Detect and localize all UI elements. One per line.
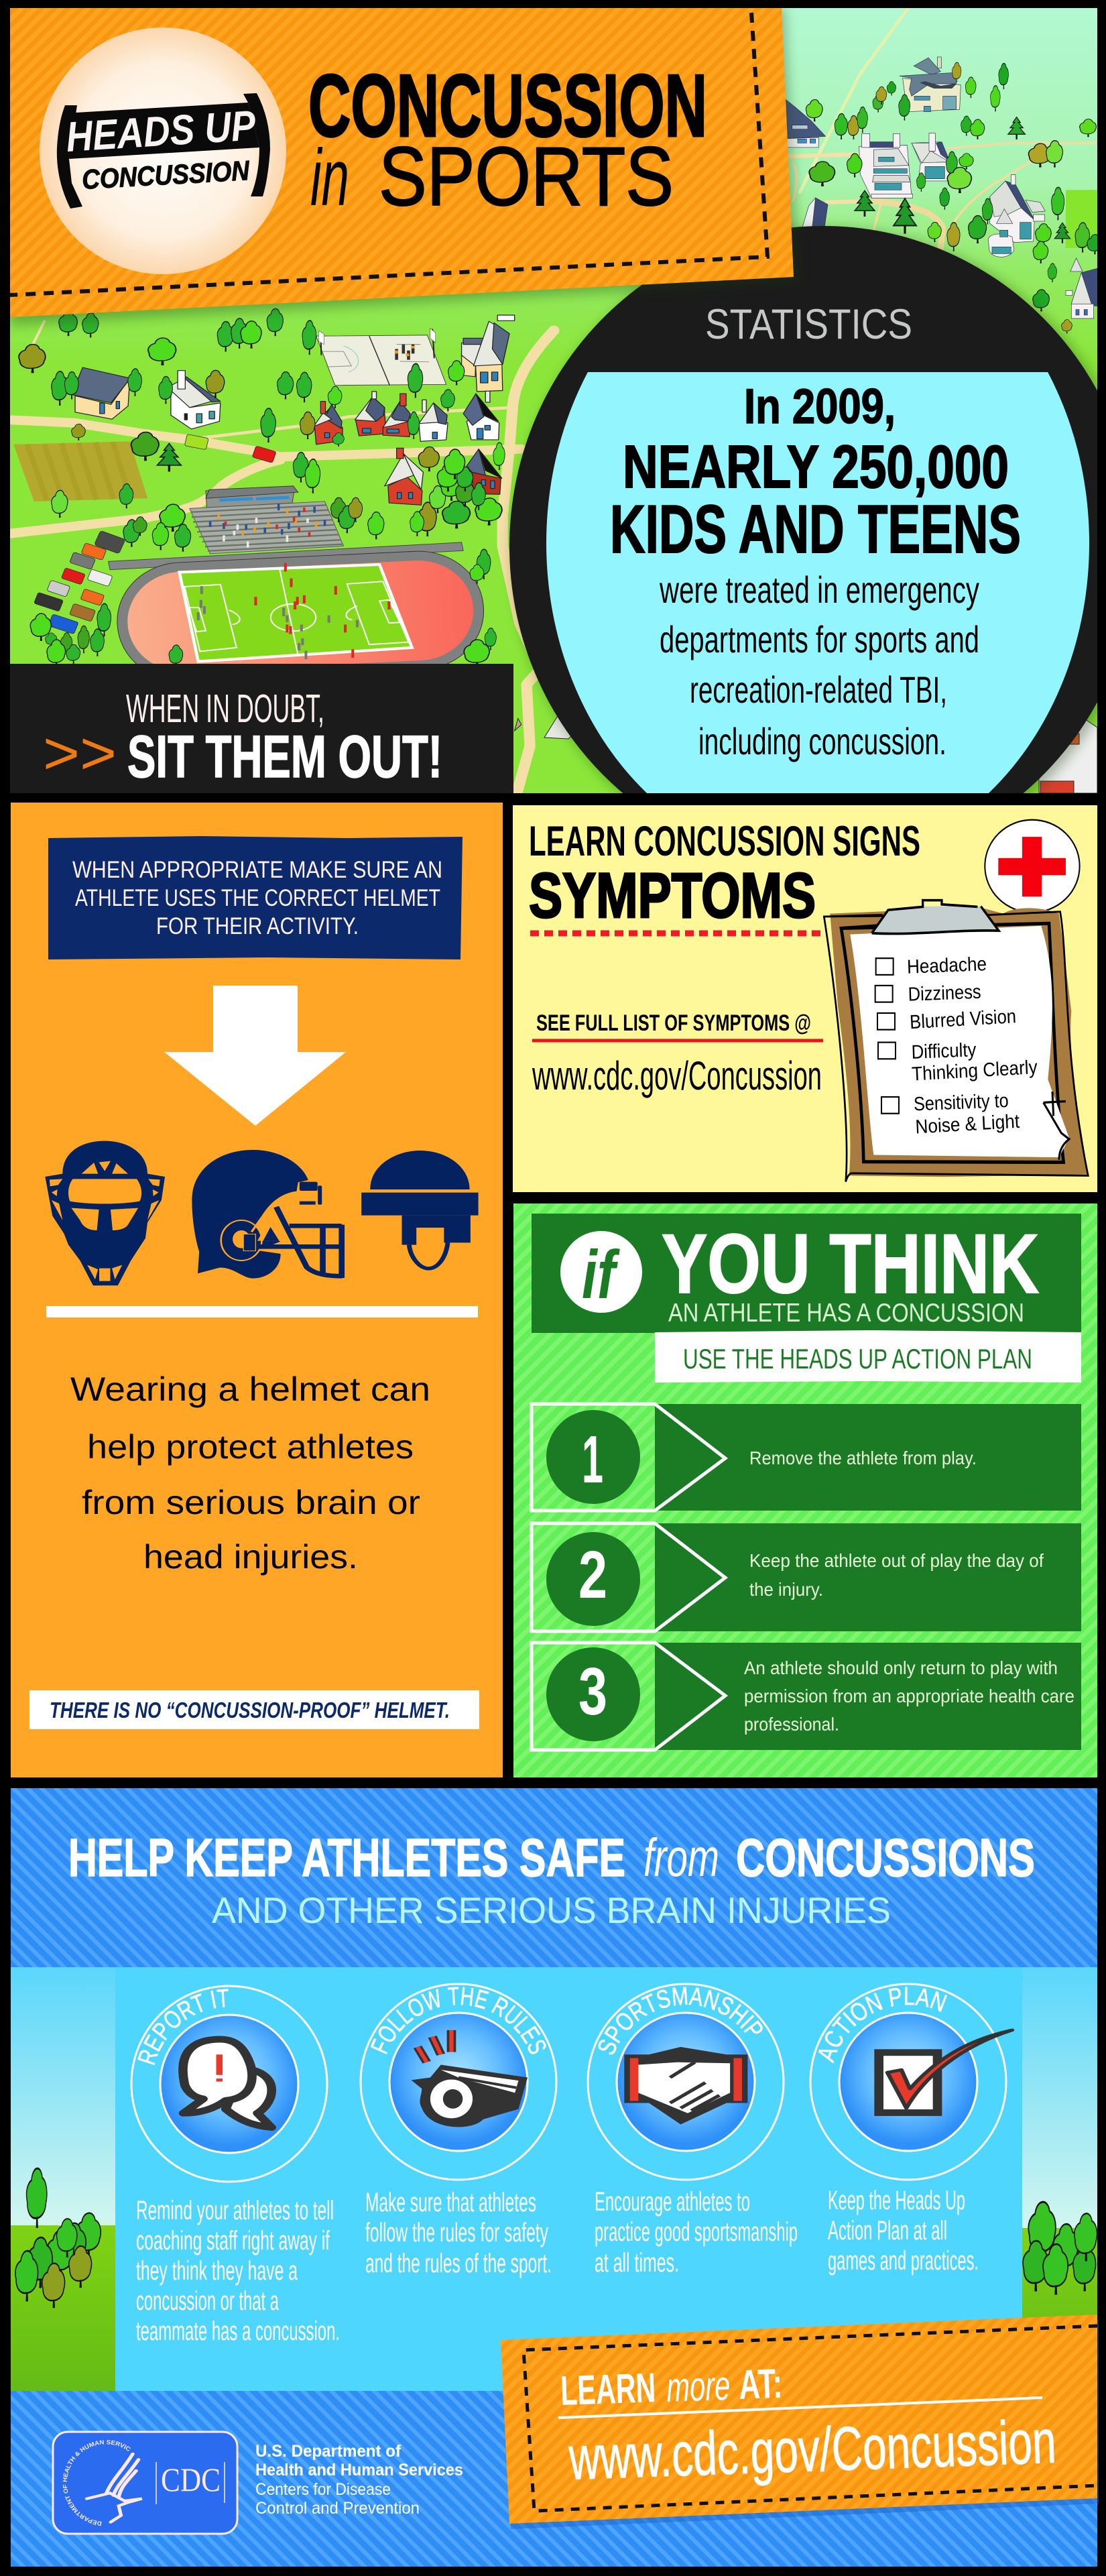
stats shadow <box>505 221 1097 793</box>
icon badge: action plan: ACTION PLAN <box>818 1987 948 2064</box>
tip text: report it <box>136 2196 340 2346</box>
heads up logo: CONCUSSION <box>81 155 251 195</box>
action plan header <box>532 1214 1081 1333</box>
stat text: NEARLY 250,000 <box>623 434 1009 501</box>
safety heading: from <box>643 1828 719 1887</box>
divider bar <box>46 1306 478 1318</box>
action plan header: if <box>582 1236 620 1313</box>
side trees left <box>15 2168 101 2308</box>
icon: clipboard checklist <box>824 900 1088 1182</box>
hhs text: Centers for Disease <box>255 2480 391 2499</box>
icon: catcher mask <box>45 1141 165 1285</box>
step 2 <box>532 1523 1081 1631</box>
tip text: report it: Remind your athletes to tell <box>136 2196 334 2225</box>
see full list text: SEE FULL LIST OF SYMPTOMS @ <box>536 1010 811 1036</box>
icon: red cross <box>985 820 1080 913</box>
house fragments near stats circle <box>544 716 1097 793</box>
arrow: down <box>164 986 346 1126</box>
icon: clipboard checklist: Headache <box>906 953 987 978</box>
grandstand <box>190 486 344 554</box>
olive field <box>13 441 147 502</box>
map: upper right neighbourhood <box>784 7 1102 333</box>
step 2: Keep the athlete out of play the day of <box>749 1550 1044 1571</box>
icon: football helmet <box>192 1150 343 1279</box>
houses <box>72 315 515 505</box>
helmet warning: THERE IS NO “CONCUSSION-PROOF” HELMET. <box>50 1698 450 1722</box>
banner shadow <box>10 8 799 325</box>
hhs text: Health and Human Services <box>255 2461 463 2479</box>
safety heading: AND OTHER SERIOUS BRAIN INJURIES <box>212 1889 891 1931</box>
panel: statistics circle <box>509 226 1097 793</box>
title text: SPORTS <box>379 131 674 223</box>
step 3: 3 <box>578 1654 607 1729</box>
learn more banner <box>501 2315 1099 2529</box>
tip text: report it: coaching staff right away if <box>136 2226 330 2256</box>
tip text: report it: they think they have a <box>136 2256 298 2286</box>
basketball court <box>316 328 446 386</box>
when in doubt text: WHEN IN DOUBT, <box>126 687 324 731</box>
title text: CONCUSSION <box>308 56 707 155</box>
icon: helmets <box>45 1141 479 1285</box>
map: lower left town <box>9 308 554 795</box>
safety heading: HELP KEEP ATHLETES SAFE <box>68 1828 625 1887</box>
step 3 <box>532 1643 1081 1750</box>
icon: hockey helmet <box>361 1151 479 1269</box>
icon badge: action plan <box>810 1983 1015 2180</box>
trees <box>19 308 505 667</box>
action plan header: AN ATHLETE HAS A CONCUSSION <box>668 1299 1024 1328</box>
hhs text: U.S. Department of <box>255 2442 402 2461</box>
learn more banner: LEARN <box>560 2365 656 2414</box>
panel: action plan <box>513 1204 1097 1777</box>
cdc logo: DEPARTMENT OF HEALTH & HUMAN SERVICES · USA <box>63 2440 130 2526</box>
use the action plan label <box>655 1330 1081 1383</box>
hhs text: Control and Prevention <box>255 2499 420 2518</box>
helmet callout box: WHEN APPROPRIATE MAKE SURE AN <box>72 857 442 883</box>
hhs text <box>255 2442 463 2518</box>
title text <box>308 56 707 223</box>
icon badge: follow the rules <box>359 1983 558 2180</box>
hidden house fragments <box>515 719 521 731</box>
cdc logo <box>52 2431 239 2534</box>
stat text: In 2009, <box>744 379 896 434</box>
stat bubble <box>546 372 1089 793</box>
tip text: sportsmanship <box>595 2187 798 2278</box>
title text: in <box>310 133 349 223</box>
learn more banner: AT: <box>738 2361 783 2408</box>
stat text <box>610 379 1021 762</box>
panel: symptoms <box>513 805 1097 1192</box>
helmet body text: from serious brain or <box>82 1484 420 1521</box>
tip text: follow the rules: and the rules of the sport. <box>365 2249 552 2278</box>
helmet callout box <box>48 836 463 959</box>
step 3: An athlete should only return to play with <box>744 1657 1058 1678</box>
step 1: Remove the athlete from play. <box>749 1448 977 1468</box>
icon badge: sportsmanship <box>587 1983 784 2180</box>
see full list text: www.cdc.gov/Concussion <box>532 1053 822 1098</box>
icon: clipboard checklist: Noise & Light <box>915 1110 1020 1138</box>
tip text: action plan: Keep the Heads Up <box>828 2186 965 2215</box>
icon: clipboard checklist: Dizziness <box>908 981 981 1005</box>
tips band <box>11 1967 1098 2391</box>
icon: clipboard checklist: Sensitivity to <box>913 1090 1009 1115</box>
step 2: 2 <box>578 1537 607 1613</box>
chevrons: >> <box>43 720 117 787</box>
symptoms heading: LEARN CONCUSSION SIGNS <box>529 818 920 865</box>
step 2: the injury. <box>749 1579 823 1600</box>
tip text: action plan: Action Plan at all <box>828 2216 947 2245</box>
step 1 <box>532 1404 1081 1511</box>
panel: helmet safety <box>11 803 503 1777</box>
tip text: sportsmanship: practice good sportsmanship <box>595 2217 798 2247</box>
symptoms heading <box>529 818 920 931</box>
panel: town map hero <box>10 8 1097 793</box>
step 3: professional. <box>744 1714 839 1735</box>
helmet body text: head injuries. <box>143 1538 358 1576</box>
symptoms heading: SYMPTOMS <box>529 860 816 931</box>
stat text: were treated in emergency <box>659 569 979 611</box>
parked cars <box>34 434 276 634</box>
panel: when in doubt <box>10 664 513 793</box>
stat text: including concussion. <box>698 720 946 762</box>
icon: clipboard checklist: Difficulty <box>911 1039 977 1063</box>
icon badge: report it: REPORT IT <box>137 1989 229 2065</box>
icon badge: sportsmanship: SPORTSMANSHIP <box>598 1987 763 2054</box>
heads up logo: HEADS UP <box>64 102 257 161</box>
tip text: action plan: games and practices. <box>828 2246 979 2276</box>
helmet callout box: ATHLETE USES THE CORRECT HELMET <box>75 885 440 911</box>
step 1: 1 <box>582 1422 603 1497</box>
see full list text <box>532 1010 823 1098</box>
cdc logo: CDC <box>161 2461 221 2498</box>
icon: clipboard checklist: Blurred Vision <box>909 1005 1017 1033</box>
icon badge: report it <box>130 1985 328 2183</box>
tip text: follow the rules: follow the rules for safety <box>365 2218 548 2247</box>
statistics heading: STATISTICS <box>705 301 912 348</box>
helmet callout box: FOR THEIR ACTIVITY. <box>156 913 359 939</box>
tip text: report it: concussion or that a <box>136 2286 279 2316</box>
step 3: permission from an appropriate health care <box>744 1686 1074 1706</box>
tip text: follow the rules: Make sure that athletes <box>365 2188 536 2217</box>
stat text: recreation-related TBI, <box>690 668 947 711</box>
helmet body text <box>70 1370 430 1576</box>
helmet body text: help protect athletes <box>87 1428 414 1466</box>
side trees right <box>1023 2202 1097 2295</box>
tip text: sportsmanship: at all times. <box>595 2248 679 2278</box>
icon: clipboard checklist: Thinking Clearly <box>911 1056 1038 1085</box>
stat text: departments for sports and <box>660 618 979 660</box>
heads up logo <box>40 27 286 274</box>
tip text: action plan <box>828 2186 979 2276</box>
sit them out text: SIT THEM OUT! <box>127 723 442 790</box>
tip text: follow the rules <box>365 2188 552 2278</box>
helmet warning <box>29 1690 479 1729</box>
icon badge: follow the rules: FOLLOW THE RULES <box>370 1987 546 2054</box>
helmet body text: Wearing a helmet can <box>70 1370 430 1408</box>
tip text: sportsmanship: Encourage athletes to <box>595 2187 750 2217</box>
tip text: report it: teammate has a concussion. <box>136 2317 340 2346</box>
learn more banner: more <box>666 2363 731 2411</box>
safety heading <box>68 1828 1035 1931</box>
panel: title banner <box>10 8 794 317</box>
running track and soccer field <box>108 542 484 664</box>
